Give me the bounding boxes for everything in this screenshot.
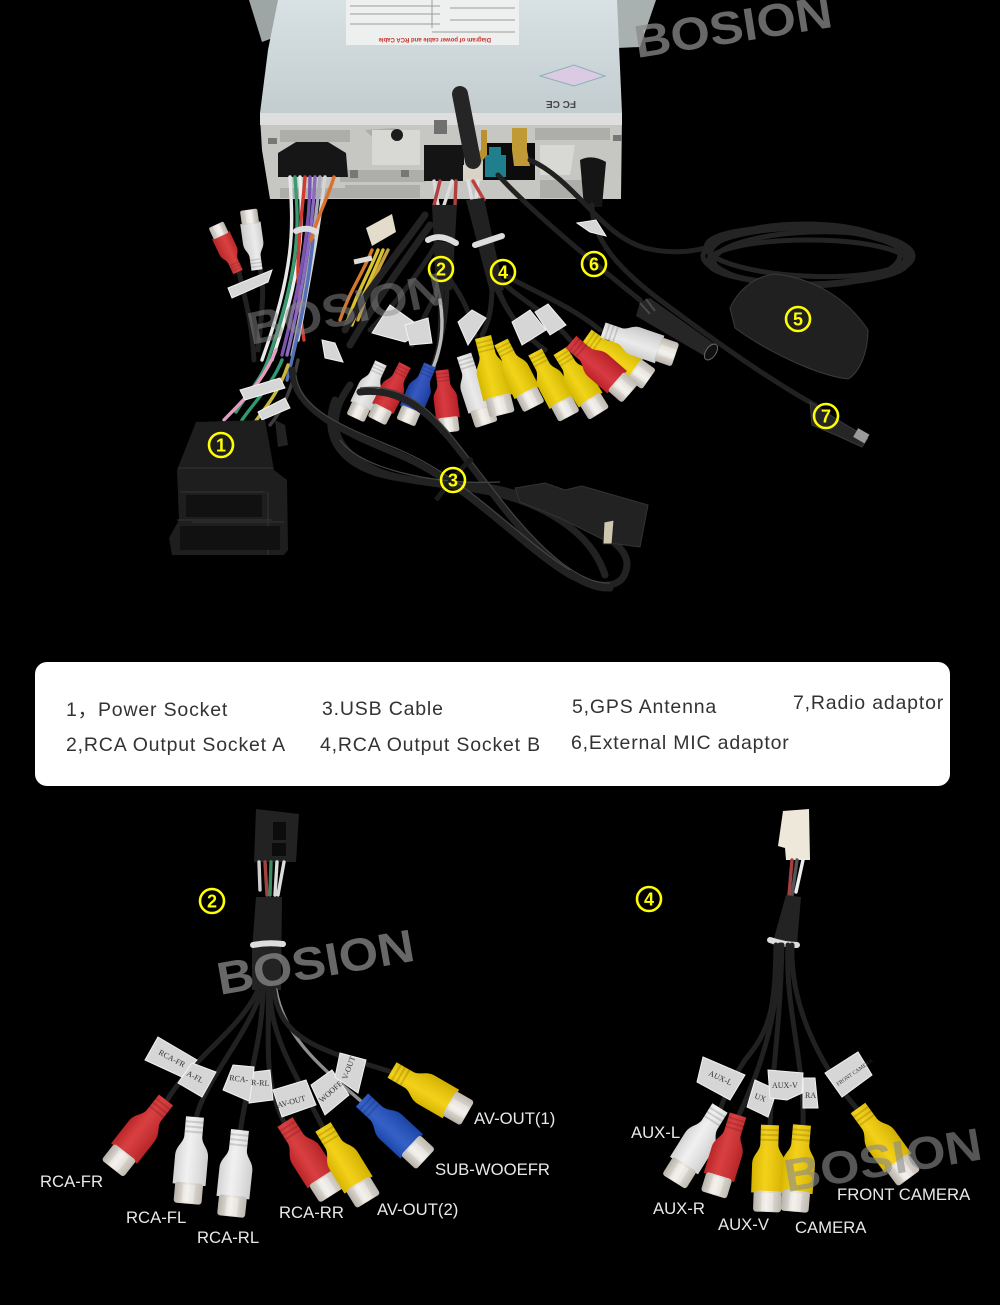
- legend panel: 4,RCA Output Socket B: [320, 734, 541, 756]
- plug labels socket b: AUX-R: [653, 1199, 705, 1218]
- mic jack: [636, 298, 720, 362]
- head unit rear: [249, 0, 656, 207]
- marker 1: [209, 433, 233, 457]
- marker 6: 6: [589, 254, 599, 274]
- watermark detail 4: BOSION: [780, 1119, 986, 1202]
- sleeve: [772, 895, 801, 945]
- tag av-out 1: [335, 1053, 366, 1093]
- top cover: [260, 0, 622, 113]
- exposed wires: [789, 860, 792, 895]
- legend panel: 6,External MIC adaptor: [571, 732, 790, 754]
- tag rca-fl: [178, 1063, 216, 1097]
- teal plug: [485, 147, 506, 177]
- tag aux-v: AUX-V: [772, 1081, 798, 1090]
- plug labels socket b: AUX-L: [631, 1123, 680, 1142]
- watermark middle: BOSION: [242, 263, 448, 355]
- tag rca-fr: [145, 1037, 197, 1077]
- tag sub: [311, 1070, 349, 1115]
- socket B: [463, 165, 482, 181]
- tag aux-v: [768, 1070, 803, 1100]
- plug labels socket a: AV-OUT(1): [474, 1109, 555, 1128]
- plug tags: [372, 305, 425, 342]
- wifi antenna: [460, 94, 473, 161]
- marker 2 detail: 2: [207, 892, 217, 912]
- marker 2: [429, 257, 453, 281]
- front panel: [260, 117, 622, 199]
- right mounting flap: [617, 0, 656, 48]
- marker 1: 1: [216, 436, 226, 456]
- plug labels socket b: AUX-V: [718, 1215, 770, 1234]
- gps puck: [730, 274, 868, 379]
- tag av-out: [273, 1080, 316, 1117]
- plug labels socket a: RCA-RL: [197, 1228, 259, 1247]
- white connector: [778, 809, 810, 860]
- usb cable loops: [292, 370, 648, 588]
- tag rca-rr: R-RL: [251, 1078, 270, 1088]
- legend panel: 2,RCA Output Socket A: [66, 734, 286, 756]
- small harness with white connector: [340, 214, 436, 345]
- plug labels socket b: FRONT CAMERA: [837, 1185, 971, 1204]
- tag rca-rl: [223, 1065, 254, 1102]
- tag camera: [803, 1078, 818, 1108]
- tag rca-fl: A-FL: [185, 1069, 205, 1085]
- cable strap: [436, 458, 472, 500]
- round jack: [580, 157, 606, 207]
- watermark detail 2: BOSION: [213, 920, 418, 1005]
- cable tie: [354, 258, 372, 262]
- marker 4 detail: [637, 887, 661, 911]
- socket A detail cable: [99, 809, 476, 1218]
- marker 4: [491, 260, 515, 284]
- tag aux-l: [697, 1057, 745, 1100]
- main connector: [169, 420, 288, 555]
- socket B detail cable: [660, 809, 922, 1213]
- marker 7: [814, 404, 838, 428]
- rating sticker: [346, 0, 519, 45]
- rca plugs main: [322, 304, 680, 434]
- harness socket: [278, 142, 348, 177]
- tag av-out 1: V-OUT: [340, 1055, 357, 1081]
- marker 4 detail: 4: [644, 890, 654, 910]
- screws: [268, 135, 622, 178]
- gold connector left: [471, 130, 487, 166]
- panel recesses: [280, 128, 610, 198]
- tag aux-l: AUX-L: [707, 1069, 734, 1087]
- socket A: [424, 145, 464, 181]
- usb plug: [515, 483, 648, 547]
- exposed wires: [259, 862, 260, 890]
- legend items: 1，Power Socket: [66, 699, 228, 721]
- marker 7: 7: [821, 406, 831, 426]
- plug labels socket a: SUB-WOOEFR: [435, 1160, 550, 1179]
- connector: [254, 809, 299, 862]
- cable tie: [770, 940, 797, 945]
- legend panel: 7,Radio adaptor: [793, 692, 944, 714]
- tag sub: WOOFER: [317, 1075, 349, 1104]
- tag rca-rl: RCA-: [229, 1073, 249, 1085]
- cable tie: [296, 229, 316, 232]
- cert marks: FC CE: [546, 98, 576, 109]
- plug labels socket a: RCA-FR: [40, 1172, 103, 1191]
- plugs: [99, 1090, 179, 1179]
- tag aux-r: [747, 1080, 777, 1117]
- marker 3: [441, 468, 465, 492]
- hologram sticker: [540, 65, 605, 86]
- plug labels socket a: RCA-RR: [279, 1203, 344, 1222]
- cable 7 radio adaptor: [577, 205, 869, 447]
- gps coil: [703, 223, 913, 287]
- tag aux-r: UX: [753, 1091, 767, 1104]
- gold connector right: [512, 128, 530, 166]
- white connector: [366, 214, 396, 246]
- tag av-out: AV-OUT: [276, 1094, 307, 1110]
- cable tie: [253, 943, 283, 945]
- tag front camera: [825, 1052, 874, 1097]
- branch cables: [720, 945, 776, 1110]
- socket A bundle: [412, 181, 475, 370]
- marker 2 detail: [200, 889, 224, 913]
- left mounting flap: [249, 0, 278, 42]
- legend panel: [35, 662, 950, 786]
- rating sticker: Diagram of power cable and RCA Cable: [378, 36, 491, 42]
- antenna block: [483, 143, 535, 180]
- branch cables: [166, 990, 258, 1102]
- marker 5: [786, 307, 810, 331]
- hole: [391, 129, 403, 141]
- plug labels socket b: CAMERA: [795, 1218, 867, 1237]
- marker 5: 5: [793, 310, 803, 330]
- legend panel: 5,GPS Antenna: [572, 696, 717, 718]
- marker 3: 3: [448, 470, 458, 490]
- gps antenna: [530, 160, 913, 379]
- harness labels: [240, 378, 285, 400]
- power harness wires: [224, 177, 334, 425]
- cable 6 external mic: [498, 175, 720, 362]
- plug labels socket b: [631, 1123, 971, 1237]
- legend panel: 3.USB Cable: [322, 698, 444, 720]
- radio plug: [810, 402, 868, 447]
- aux rca pair: [207, 208, 272, 360]
- tag camera: RA: [805, 1091, 816, 1100]
- plug labels socket a: AV-OUT(2): [377, 1200, 458, 1219]
- plug labels socket a: RCA-FL: [126, 1208, 186, 1227]
- marker 2: 2: [436, 260, 446, 280]
- marker 4: 4: [498, 262, 508, 282]
- socket B bundle: [466, 181, 600, 350]
- aux tag: [228, 270, 272, 298]
- tag front camera: FRONT CAMERA: [836, 1058, 874, 1088]
- usb mouth: [603, 520, 614, 544]
- plugs: [660, 1099, 734, 1191]
- sleeve: [252, 897, 282, 990]
- tag rca-rr: [249, 1070, 273, 1103]
- plug labels socket a: [40, 1109, 555, 1247]
- marker 6: [582, 252, 606, 276]
- tag rca-fr: RCA-FR: [157, 1048, 187, 1070]
